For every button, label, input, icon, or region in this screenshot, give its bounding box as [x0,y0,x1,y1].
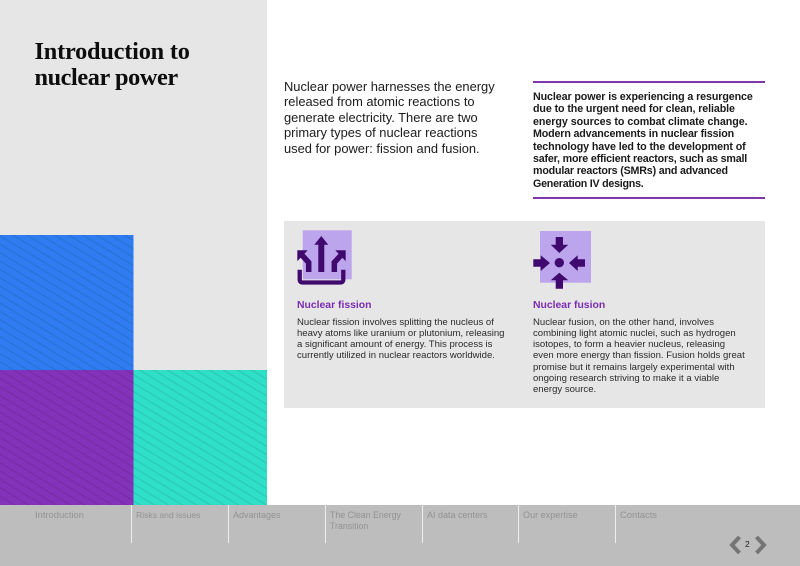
text: nuclear fission [297,316,504,361]
nav: Advantages [228,505,281,543]
callout: due to the urgent need for clean, reliable [533,103,735,115]
callout: energy sources to combat climate change. [533,116,748,128]
panel: reaction types [284,221,765,408]
callout: technology have led to the development of [533,141,746,153]
text: nuclear fusion: combining light atomic nuclei, such as hydrogen [533,328,736,339]
nav: Our expertise [518,505,578,543]
heading: nuclear fission: Nuclear fission [297,300,372,310]
text: nuclear fusion: energy source. [533,384,596,395]
text: nuclear fusion: even more energy than fission. Fusion holds great [533,350,745,361]
callout: Nuclear power is experiencing a resurgence [533,91,753,103]
intro text: released from atomic reactions to [284,94,475,109]
title [34,38,190,91]
icon: previous page arrow [729,536,741,554]
nav: The Clean Energy Transition: Transition [330,520,368,530]
icon: fission arrows [297,230,352,285]
panel: left grey sidebar [0,0,267,505]
text: nuclear fusion [533,316,745,395]
text: nuclear fission: a significant amount of energy. This process is [297,339,492,350]
title: nuclear power [34,64,178,91]
icon: fusion arrows [533,231,591,289]
callout: Modern advancements in nuclear fission [533,128,734,140]
nav: AI data centers [422,505,488,543]
text: nuclear fusion: Nuclear fusion, on the other hand, involves [533,316,714,328]
nav: AI data centers: AI data centers [427,510,488,520]
nav: The Clean Energy Transition [325,505,401,543]
navigation bar [0,505,800,566]
callout: safer, more efficient reactors, such as small [533,153,747,165]
callout [533,81,765,199]
callout: Generation IV designs. [533,178,644,190]
icon: next page arrow [755,536,767,554]
nav: Contacts [615,505,657,543]
nav: Our expertise: Our expertise [523,510,578,520]
text: nuclear fusion: ongoing research striving to make it a viable [533,373,719,384]
text: nuclear fusion: promise but it remains largely experimental with [533,362,735,373]
nav: The Clean Energy Transition: The Clean Energy [330,510,401,520]
text: nuclear fusion: isotopes, to form a heavier nucleus, releasing [533,339,725,350]
intro text: generate electricity. There are two [284,110,478,125]
intro text: used for power: fission and fusion. [284,141,480,156]
nav: Risks and issues: Risks and issues [136,510,200,520]
intro text [284,79,495,156]
nav: Introduction: Introduction [35,509,84,520]
decorative colour blocks [0,235,267,505]
text: nuclear fission: currently utilized in nuclear reactors worldwide. [297,350,495,361]
text: nuclear fission: heavy atoms like uranium or plutonium, releasing [297,328,504,339]
intro text: Nuclear power harnesses the energy [284,79,495,94]
callout: modular reactors (SMRs) and advanced [533,165,728,177]
intro text: primary types of nuclear reactions [284,125,477,140]
nav: Advantages: Advantages [233,510,281,520]
heading: nuclear fusion: Nuclear fusion [533,300,605,310]
text: nuclear fission: Nuclear fission involves splitting the nucleus of [297,316,494,328]
nav: Contacts: Contacts [620,509,657,520]
nav: Risks and issues [131,505,200,543]
page number: 2 [745,539,750,549]
title: Introduction to [34,38,190,65]
